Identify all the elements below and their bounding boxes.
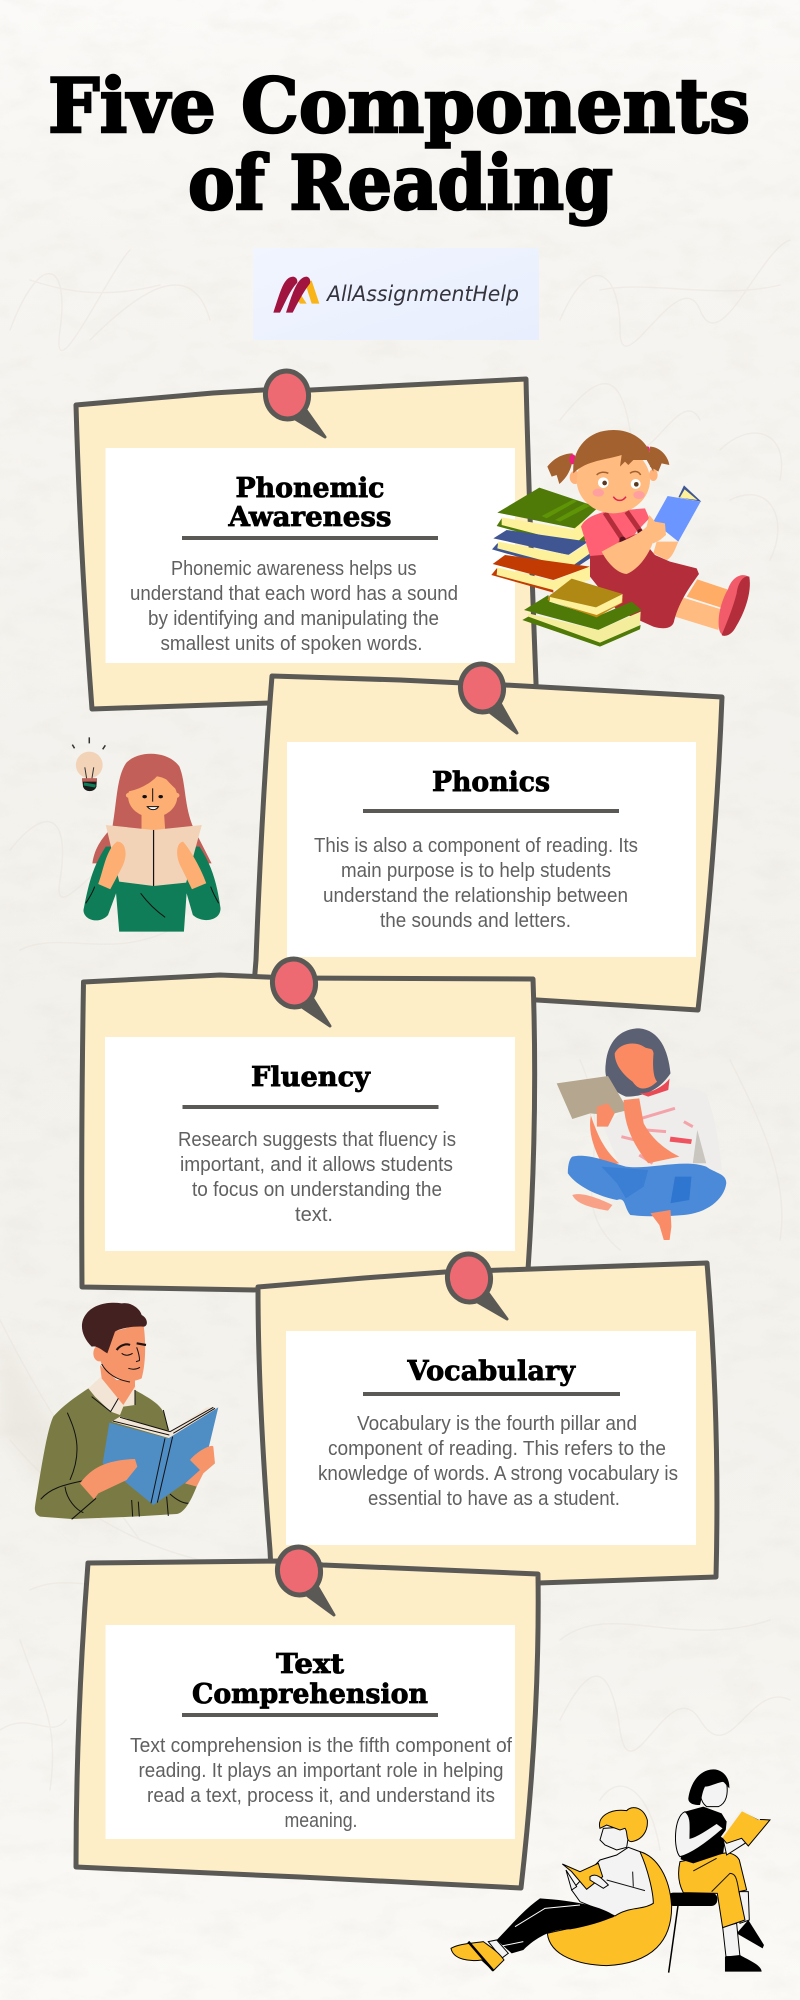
body: Text Comprehension: read a text, process it, and understand its (147, 1784, 495, 1807)
body: Text Comprehension: reading. It plays an important role in helping (138, 1759, 504, 1782)
body: Phonemic Awareness: by identifying and manipulating the (148, 607, 439, 630)
panel: Fluency (82, 956, 535, 1290)
heading: Phonemic Awareness (227, 473, 392, 533)
body: Phonemic Awareness: smallest units of spoken words. (160, 632, 422, 655)
illustration: woman reading with light bulb (72, 737, 221, 932)
body: Text Comprehension: Text comprehension is the fifth component of (130, 1734, 512, 1757)
panel: Phonics (254, 661, 722, 1010)
title: Five Components (48, 62, 750, 150)
heading: Text Comprehension (192, 1649, 428, 1710)
panel: Vocabulary (258, 1251, 717, 1590)
body: Fluency: Research suggests that fluency is (178, 1128, 456, 1151)
body: Vocabulary (318, 1412, 678, 1510)
body: Phonics (314, 834, 638, 932)
body: Fluency: to focus on understanding the (192, 1178, 442, 1201)
illustration: watercolor woman reading (557, 1028, 726, 1240)
body: Vocabulary: Vocabulary is the fourth pillar and (357, 1412, 637, 1435)
heading: Phonemic Awareness: Phonemic (236, 473, 384, 504)
heading: Vocabulary: Vocabulary (406, 1356, 576, 1387)
logo: AllAssignmentHelp: AllAssignmentHelp (325, 282, 519, 306)
heading: Text Comprehension: Text (276, 1649, 345, 1680)
heading: Phonics: Phonics (432, 767, 550, 798)
pin 4 (444, 1251, 507, 1319)
body: Phonemic Awareness: Phonemic awareness helps us (171, 557, 416, 580)
body: Phonemic Awareness: understand that each word has a sound (130, 582, 458, 605)
body: Vocabulary: knowledge of words. A strong vocabulary is (318, 1462, 678, 1485)
body: Vocabulary: essential to have as a student. (368, 1487, 620, 1510)
body: Text Comprehension: meaning. (284, 1809, 358, 1832)
body: Phonics: the sounds and letters. (380, 909, 571, 932)
title (48, 62, 750, 227)
body: Text Comprehension (130, 1734, 512, 1832)
body: Phonemic Awareness (130, 557, 458, 655)
heading: Fluency: Fluency (251, 1062, 371, 1093)
pin 3 (269, 956, 330, 1026)
illustration: two women reading on beanbag and stool (451, 1769, 770, 1973)
panel: Phonemic Awareness (76, 368, 536, 709)
body: Vocabulary: component of reading. This refers to the (328, 1437, 666, 1460)
title: of Reading (188, 139, 613, 227)
body: Phonics: main purpose is to help students (341, 859, 611, 882)
panel: Text Comprehension (76, 1544, 538, 1888)
pin 2 (457, 661, 517, 733)
heading: Text Comprehension: Comprehension (192, 1679, 428, 1710)
body: Fluency: text. (295, 1203, 333, 1226)
pin 1 (262, 368, 325, 437)
body: Fluency (178, 1128, 456, 1226)
body: Phonics: This is also a component of reading. Its (314, 834, 638, 857)
illustration: man reading blue book (35, 1303, 218, 1519)
body: Phonics: understand the relationship between (323, 884, 628, 907)
illustration: girl reading on books (491, 430, 750, 647)
pin 5 (274, 1544, 334, 1615)
heading: Phonemic Awareness: Awareness (227, 502, 392, 533)
logo: AllAssignmentHelp (253, 248, 539, 340)
body: Fluency: important, and it allows students (180, 1153, 453, 1176)
